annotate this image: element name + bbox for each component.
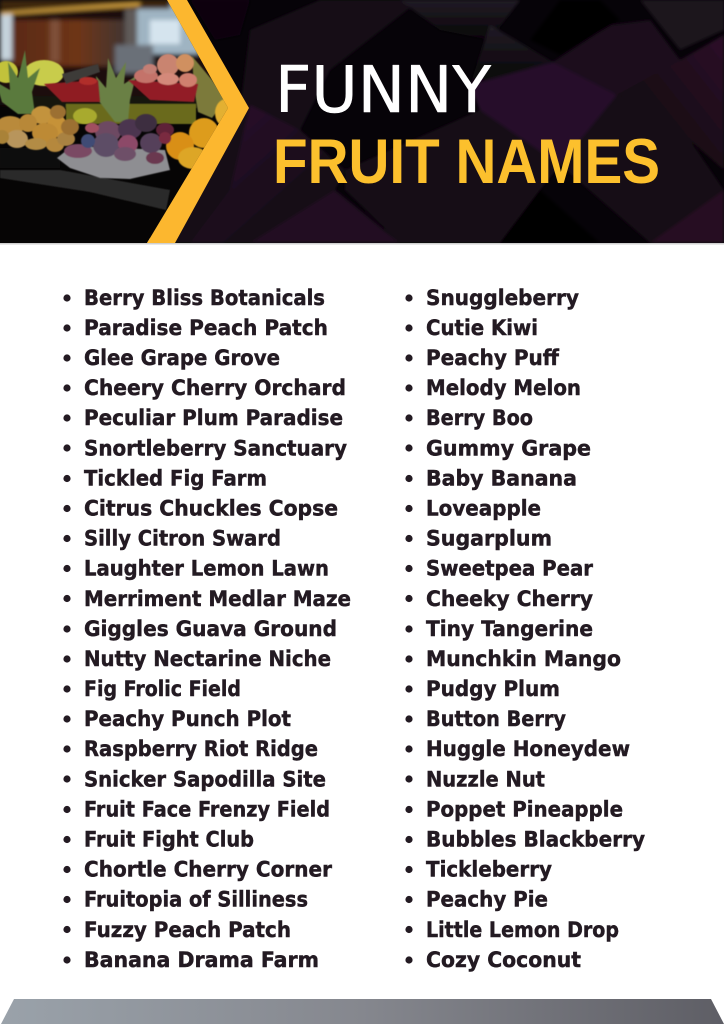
right column list: Peachy Pie bbox=[426, 888, 548, 912]
header bottom edge bbox=[0, 243, 724, 244]
fruit: red bowls and peaches bbox=[44, 54, 198, 102]
right column list: Baby Banana bbox=[426, 466, 577, 490]
right column list: Sugarplum bbox=[426, 526, 552, 550]
title: FRUIT NAMES: FRUIT NAMES bbox=[273, 127, 660, 197]
right column list: Button Berry bbox=[426, 707, 566, 731]
fruit: kiwis and lemons bbox=[0, 99, 237, 169]
left column list: Berry Bliss Botanicals bbox=[84, 286, 325, 310]
right column list: Munchkin Mango bbox=[426, 647, 621, 671]
right column list: Snuggleberry bbox=[426, 286, 579, 310]
left column list: Nutty Nectarine Niche bbox=[84, 647, 331, 671]
fruit: yellow grapes and pineapples bbox=[0, 50, 226, 122]
left column list: Peachy Punch Plot bbox=[84, 707, 291, 731]
right column list: Peachy Puff bbox=[426, 346, 560, 370]
left column list: Merriment Medlar Maze bbox=[84, 587, 351, 611]
title: FUNNY: FUNNY bbox=[275, 54, 492, 128]
right column list: Nuzzle Nut bbox=[426, 768, 545, 792]
left column list: Peculiar Plum Paradise bbox=[84, 406, 343, 430]
left column list: Fruit Fight Club bbox=[84, 828, 254, 852]
right column list: Poppet Pineapple bbox=[426, 798, 623, 822]
right column list: Huggle Honeydew bbox=[426, 737, 630, 761]
right column list: Little Lemon Drop bbox=[426, 918, 619, 942]
right column list: Tiny Tangerine bbox=[426, 617, 593, 641]
right column list: Loveapple bbox=[426, 496, 541, 520]
right column list: Cozy Coconut bbox=[426, 948, 581, 972]
left column list: Chortle Cherry Corner bbox=[84, 858, 333, 882]
left column list: Banana Drama Farm bbox=[84, 948, 319, 972]
left column list: Fig Frolic Field bbox=[84, 677, 241, 701]
photo backdrop bbox=[0, 0, 232, 105]
left column list: Cheery Cherry Orchard bbox=[84, 376, 346, 400]
left column list: Citrus Chuckles Copse bbox=[84, 496, 338, 520]
dark faceted background bbox=[150, 0, 724, 243]
left column list: Fuzzy Peach Patch bbox=[84, 918, 291, 942]
right column list: Gummy Grape bbox=[426, 436, 591, 460]
fruit: plums in shell bowl bbox=[57, 114, 174, 179]
fruit shelf and counter bbox=[0, 96, 205, 210]
left column list: Fruitopia of Silliness bbox=[84, 888, 308, 912]
left column list: Raspberry Riot Ridge bbox=[84, 737, 318, 761]
left column list: Snortleberry Sanctuary bbox=[84, 436, 347, 460]
right column list: Cheeky Cherry bbox=[426, 587, 593, 611]
footer gradient bar bbox=[1, 999, 724, 1024]
photo: fruit display bbox=[0, 0, 237, 243]
left column list: Paradise Peach Patch bbox=[84, 316, 328, 340]
right column list: Melody Melon bbox=[426, 376, 581, 400]
left column list: Silly Citron Sward bbox=[84, 526, 281, 550]
right column list: Cutie Kiwi bbox=[426, 316, 538, 340]
left column list: Glee Grape Grove bbox=[84, 346, 280, 370]
left column list: Laughter Lemon Lawn bbox=[84, 556, 329, 580]
right column list: Pudgy Plum bbox=[426, 677, 560, 701]
right column list: Tickleberry bbox=[426, 858, 552, 882]
left column list: Snicker Sapodilla Site bbox=[84, 768, 326, 792]
left column list bbox=[63, 286, 351, 972]
right column list: Berry Boo bbox=[426, 406, 533, 430]
right column list bbox=[405, 286, 645, 972]
left column list: Giggles Guava Ground bbox=[84, 617, 337, 641]
left column list: Fruit Face Frenzy Field bbox=[84, 798, 330, 822]
right column list: Bubbles Blackberry bbox=[426, 828, 645, 852]
right column list: Sweetpea Pear bbox=[426, 556, 594, 580]
header banner bbox=[0, 0, 724, 243]
yellow chevron bbox=[147, 0, 249, 243]
photo base bbox=[0, 0, 232, 243]
left column list: Tickled Fig Farm bbox=[84, 466, 267, 490]
